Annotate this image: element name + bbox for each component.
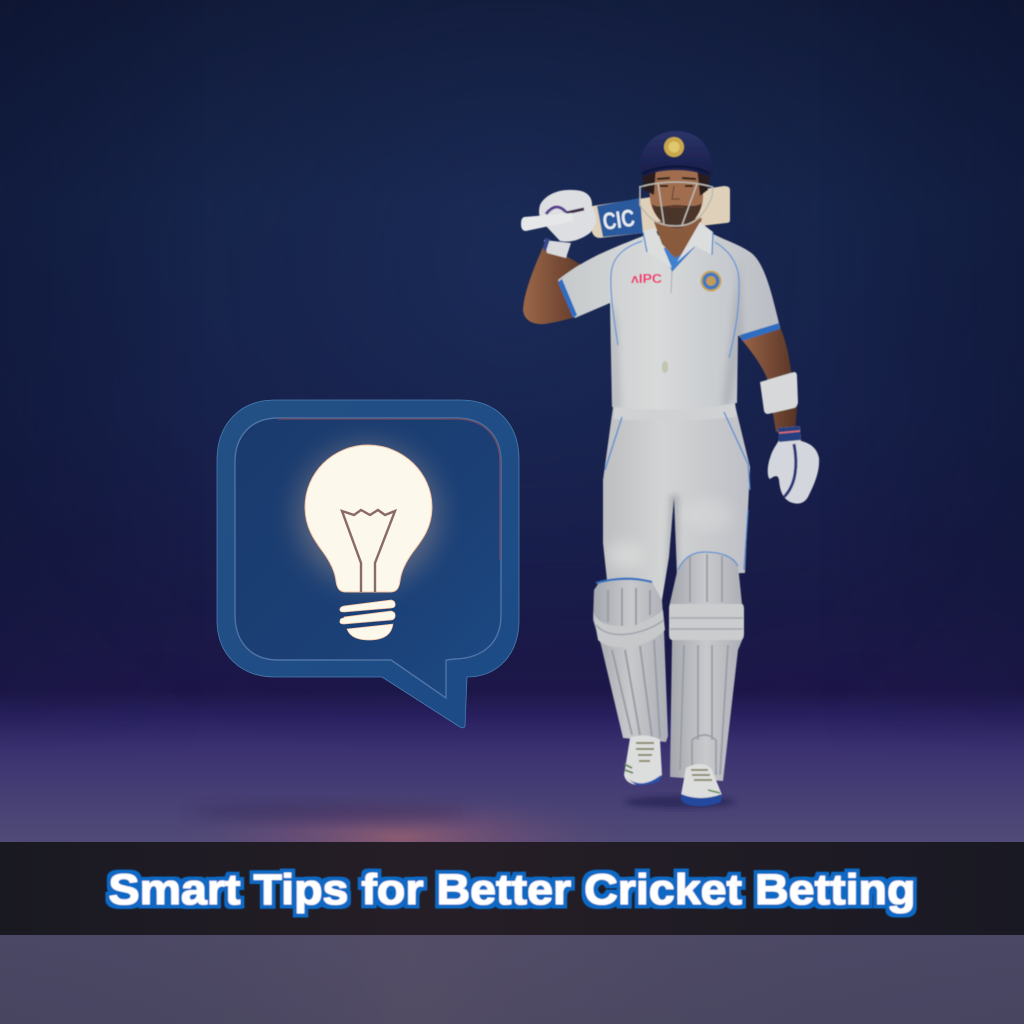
sponsor logo: ᴧIPC [631, 271, 663, 286]
left leg pad [593, 578, 668, 742]
bubble body [217, 400, 519, 728]
bulb glass [305, 445, 432, 592]
neck [654, 218, 702, 258]
helmet grille [639, 182, 713, 226]
cricket player [521, 131, 819, 806]
left pad knee roll [593, 610, 665, 647]
right leg pad [669, 552, 744, 781]
left arm raised [523, 247, 590, 324]
floor shadow under bubble [190, 803, 470, 821]
chest crest [700, 270, 722, 292]
title band [0, 842, 1024, 935]
helmet visor edge [642, 166, 710, 174]
shirt sleeve cuffs [558, 279, 577, 318]
collar [643, 228, 672, 268]
head and helmet [639, 131, 713, 228]
beard [652, 203, 702, 228]
bat blue label [597, 198, 643, 237]
glove wrist strap [544, 240, 571, 258]
shirt shading [611, 310, 622, 408]
shirt stain [662, 361, 668, 373]
left shoe [624, 736, 662, 785]
nose and mouth [672, 186, 680, 199]
floor shadow under player [625, 796, 735, 808]
bubble inner panel [235, 418, 501, 698]
title text: Smart Tips for Better Cricket Betting [108, 866, 916, 914]
face [648, 170, 704, 228]
right pad knee rolls [669, 604, 744, 640]
right shoe [681, 764, 722, 806]
shirt [558, 218, 780, 410]
bubble inner warm edge [278, 419, 500, 560]
bat label lettering: CIC [601, 205, 637, 236]
cricket bat [592, 186, 730, 238]
right wristband [760, 372, 798, 414]
bulb filament [342, 510, 395, 592]
right arm hanging [738, 327, 797, 432]
helmet crest [664, 137, 684, 157]
raglan piping [611, 241, 739, 358]
eyes and brows [657, 178, 696, 179]
placket [671, 270, 672, 293]
bat blade [592, 186, 730, 238]
waistband [613, 403, 737, 421]
trouser piping [605, 412, 750, 570]
bulb glow [298, 445, 438, 585]
glove accent [546, 207, 566, 214]
right pad top edge [678, 552, 738, 570]
left pad ribs [608, 588, 660, 738]
speech bubble with light bulb icon [217, 400, 519, 728]
bat handle [521, 213, 573, 231]
left pad top edge [596, 579, 652, 583]
right pad ribs [680, 554, 728, 775]
icon: light bulb [305, 445, 432, 640]
hair side shadows [642, 168, 710, 196]
trouser shading [666, 495, 679, 590]
trousers [603, 403, 750, 600]
left batting glove [521, 190, 596, 258]
bulb screw base [340, 600, 395, 640]
helmet shell [640, 131, 712, 177]
right batting glove [768, 426, 819, 504]
